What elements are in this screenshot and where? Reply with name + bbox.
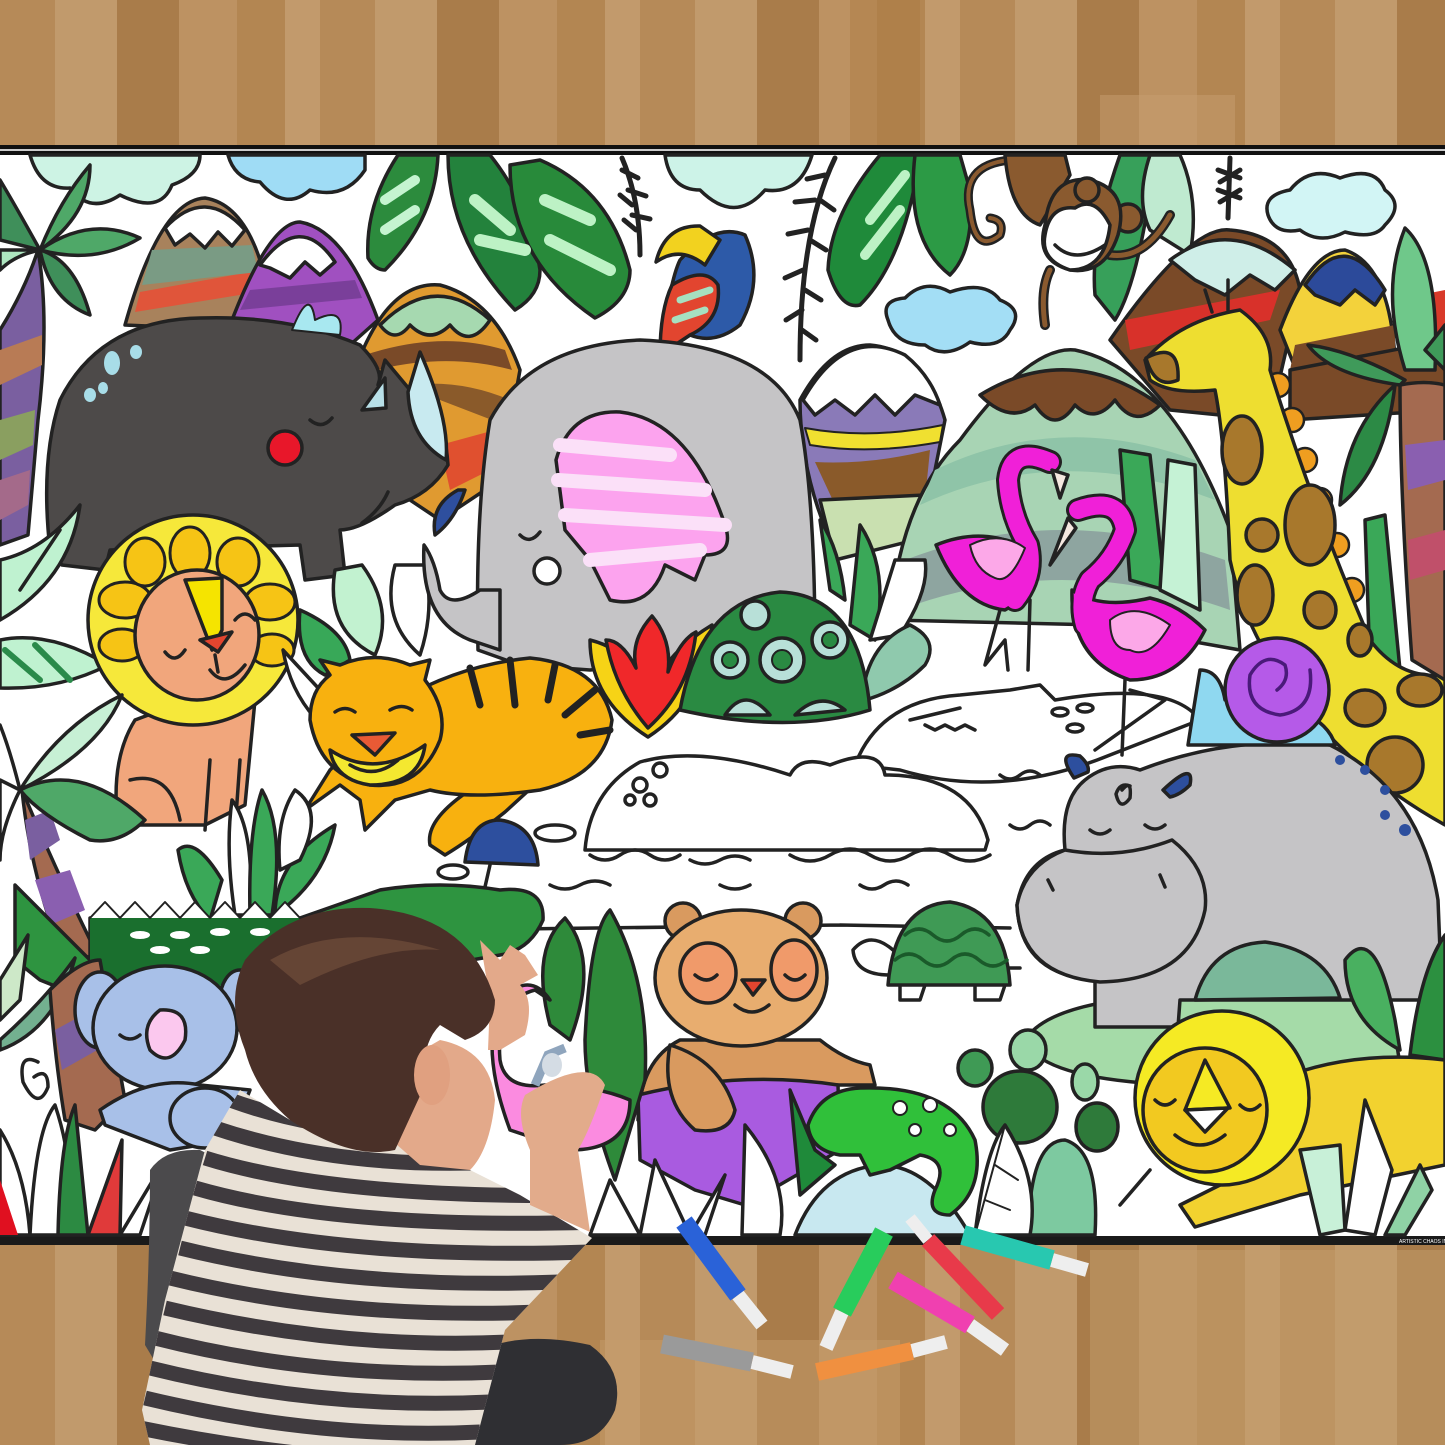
red marker [910,1218,998,1314]
palm lower left [0,695,145,960]
panda bear [638,903,875,1205]
monkey [968,155,1170,325]
toucan [656,226,754,355]
boy legs [145,1150,220,1370]
hippo outline [440,756,1050,930]
left leaves [0,505,108,688]
green marker [826,1232,884,1348]
rock and leaves right [1195,935,1445,1060]
crocodile outline [855,685,1200,782]
boy raised hand [480,940,538,1050]
grey marker [662,1344,792,1372]
left palm [0,165,140,545]
boy head [370,1040,495,1170]
chameleon [742,1088,977,1235]
right palm [1308,228,1445,680]
leaves top [368,155,1193,320]
tiger [305,658,612,855]
boy arm [521,1072,605,1232]
hippo grey [1017,743,1442,1027]
marker tip [542,1053,562,1077]
giraffe [1145,280,1445,825]
green leaves bottom middle [543,910,725,1235]
snail [1188,638,1335,745]
boy shirt [130,1085,610,1445]
teal marker [963,1235,1087,1270]
flamingo legs over croc [1095,680,1165,755]
green ground right [1025,995,1400,1085]
turtle bottom [853,902,1020,1000]
orange marker [817,1342,946,1372]
boy ear [414,1045,450,1105]
cactus [958,1030,1118,1235]
pink flamingo [492,985,630,1150]
rhino [47,305,448,580]
left lower tropical [0,935,165,1235]
lion upper [88,515,298,830]
mountains right [800,230,1445,650]
boy hair [235,908,495,1152]
marker in hand [535,1048,565,1085]
flower [590,616,712,737]
plants center [820,450,1400,670]
poster [0,145,1445,1245]
flamingos [936,456,1205,680]
lion lower right [1120,1011,1445,1235]
pink marker [893,1280,1005,1350]
left flamingo [936,456,1068,610]
hanging vines [620,158,1240,360]
right flamingo [1050,506,1205,680]
elephant [424,340,815,670]
koala [75,966,260,1150]
markers [662,1218,1087,1372]
mushroom [438,820,575,905]
blue marker [684,1222,762,1325]
boy knee [440,1339,617,1445]
leaves behind tiger [283,565,429,718]
clouds [30,155,1395,352]
turtle top [680,592,930,722]
mountains left [125,198,520,520]
child [130,908,617,1445]
lower left plant and green crocodile [15,790,543,1000]
